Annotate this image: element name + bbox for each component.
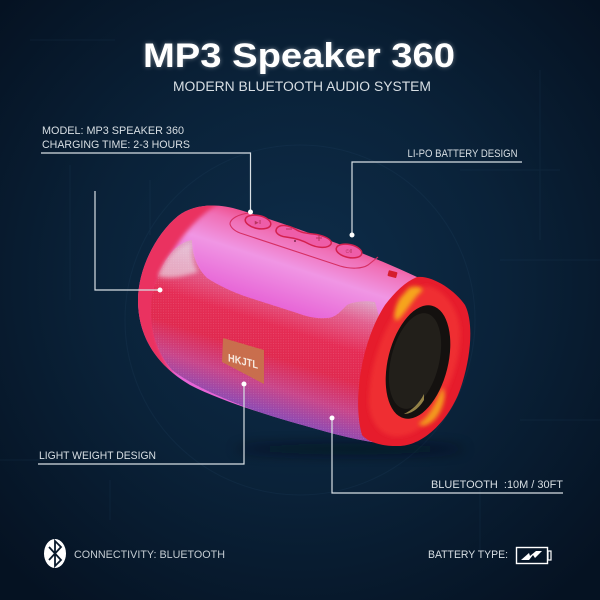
mode button: ⏻II bbox=[346, 249, 352, 255]
orange glow top bbox=[394, 287, 422, 320]
callout: light weight design bbox=[38, 382, 246, 464]
play button bbox=[244, 213, 272, 231]
callout: model and charging time: MODEL: MP3 SPEAKER 360 bbox=[42, 125, 184, 137]
title: MP3 Speaker 360 bbox=[143, 37, 455, 75]
speaker body bbox=[138, 205, 417, 445]
callout: bluetooth range bbox=[330, 416, 563, 493]
speaker bbox=[130, 200, 470, 446]
callout: li-po battery design bbox=[350, 148, 522, 238]
control panel outline bbox=[230, 213, 378, 268]
shadow under speaker bbox=[235, 443, 465, 455]
icon: bluetooth bbox=[44, 539, 66, 568]
logo badge bbox=[222, 338, 264, 384]
icon: battery bbox=[516, 548, 551, 564]
callout: model and charging time: CHARGING TIME: 2-3 HOURS bbox=[42, 139, 190, 151]
grille texture bbox=[151, 240, 380, 445]
callout: li-po battery design: LI-PO BATTERY DESIGN bbox=[408, 148, 518, 160]
indicator light bbox=[387, 270, 398, 278]
subtitle: MODERN BLUETOOTH AUDIO SYSTEM bbox=[173, 79, 431, 94]
red ring bbox=[358, 277, 470, 446]
ring inner light bbox=[369, 286, 460, 436]
callout: body pointer bbox=[95, 191, 162, 292]
connectivity label: CONNECTIVITY: BLUETOOTH bbox=[74, 549, 225, 561]
callout: model and charging time bbox=[41, 125, 253, 214]
callout: light weight design: LIGHT WEIGHT DESIGN bbox=[39, 450, 156, 462]
mode button bbox=[335, 242, 363, 260]
left end cap bbox=[138, 206, 219, 376]
orange glow bottom bbox=[419, 388, 444, 426]
speaker driver bbox=[375, 298, 461, 426]
logo badge: HKJTL bbox=[228, 352, 258, 372]
battery label: BATTERY TYPE: bbox=[428, 549, 508, 561]
title: MP3 Speaker 360 bbox=[143, 37, 455, 75]
callout: bluetooth range: BLUETOOTH :10M / 30FT bbox=[431, 479, 563, 491]
left grille highlight bbox=[158, 243, 198, 278]
volume rocker bbox=[276, 225, 331, 247]
grille bbox=[151, 240, 380, 445]
play button: ▶II bbox=[255, 220, 261, 226]
